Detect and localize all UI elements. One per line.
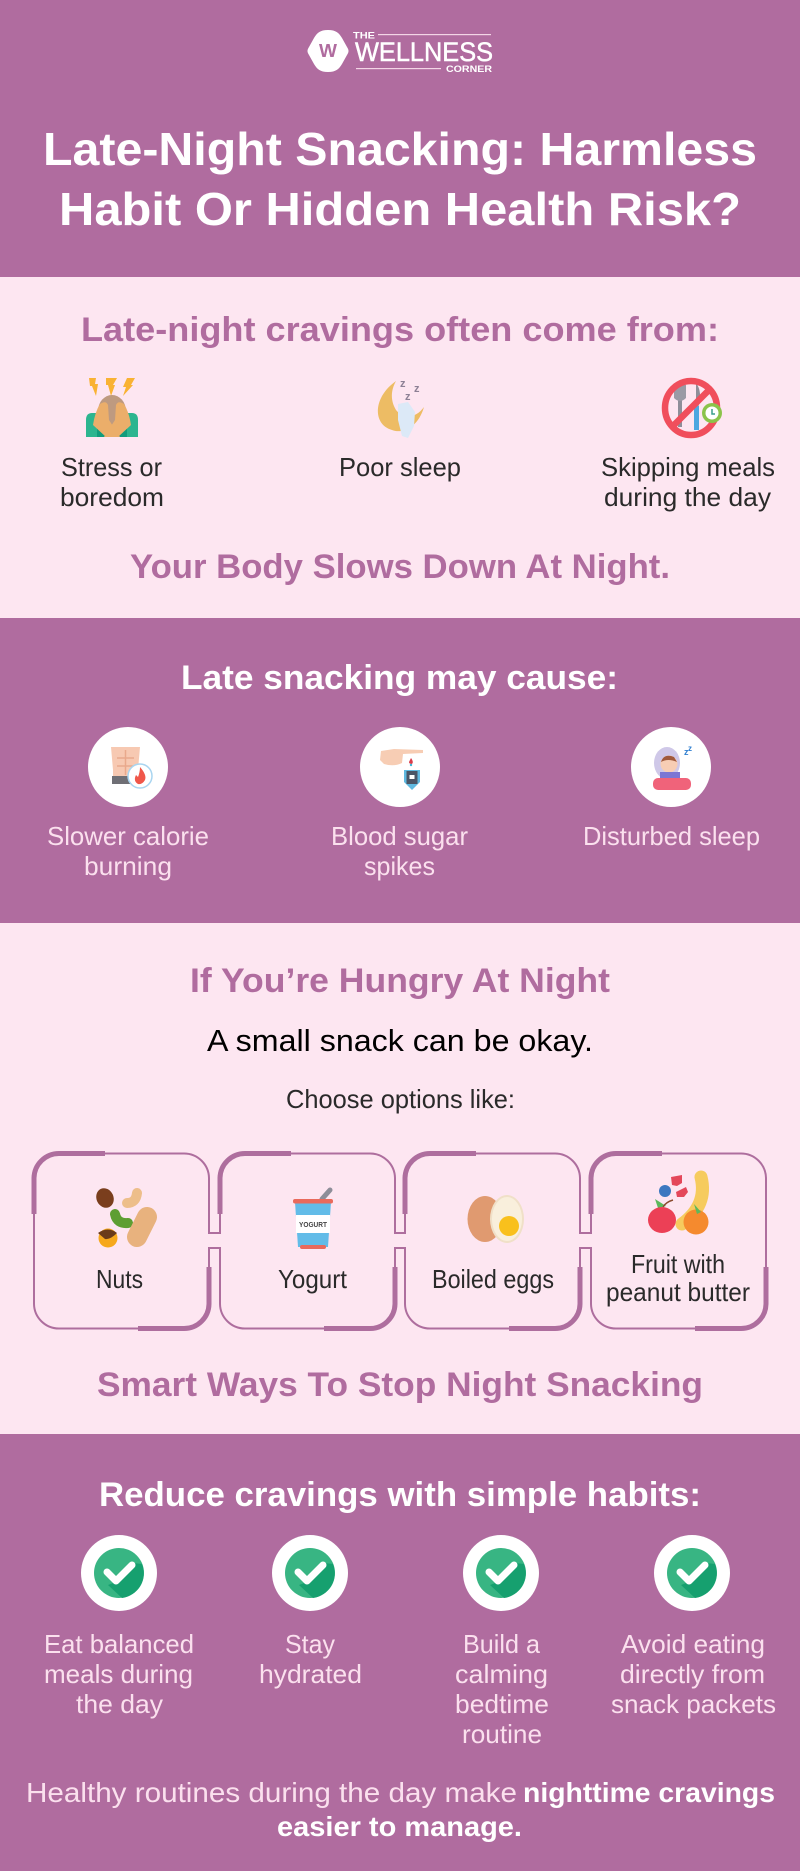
heading: smart ways: Smart Ways To Stop Night Snacking — [97, 1366, 703, 1404]
icon: sleeping moon: z — [400, 378, 406, 390]
icon: disturbed sleep: z — [688, 744, 692, 753]
label: stay hydrated — [259, 1629, 362, 1689]
label: bedtime routine: calming — [455, 1659, 548, 1689]
label: stay hydrated: Stay — [285, 1629, 335, 1659]
icon: sleeping moon: z — [414, 383, 420, 395]
icon: blood sugar meter — [360, 727, 440, 807]
panel: causes of cravings — [0, 277, 800, 618]
label: blood sugar spikes: spikes — [364, 851, 435, 881]
label: avoid snack packets — [611, 1629, 776, 1719]
logo: The Wellness Corner: W — [319, 41, 337, 61]
icon: check 2 — [272, 1535, 348, 1611]
label: eat balanced meals: meals during — [44, 1659, 193, 1689]
text: small snack: A small snack can be okay. — [207, 1023, 593, 1058]
icon: calorie burning — [88, 727, 168, 807]
icon: sleeping moon — [378, 378, 424, 438]
label: fruit with peanut butter — [606, 1249, 750, 1307]
label: bedtime routine: Build a — [463, 1629, 541, 1659]
text: choose options: Choose options like: — [286, 1084, 515, 1114]
label: skipping meals: during the day — [604, 482, 771, 512]
label: eat balanced meals: the day — [76, 1689, 163, 1719]
icon: check 3 — [463, 1535, 539, 1611]
title: Habit Or Hidden Health Risk? — [59, 183, 741, 235]
label: stress or boredom: boredom — [60, 482, 164, 512]
label: yogurt: Yogurt — [278, 1264, 348, 1294]
panel: if you're hungry — [0, 923, 800, 1434]
icon: check 1 — [81, 1535, 157, 1611]
label: eat balanced meals: Eat balanced — [44, 1629, 194, 1659]
panel: late snacking effects — [0, 618, 800, 923]
label: skipping meals — [601, 452, 775, 512]
icon: fruit — [648, 1175, 708, 1234]
label: eat balanced meals — [44, 1629, 194, 1719]
label: bedtime routine: bedtime — [455, 1689, 549, 1719]
logo: The Wellness Corner: WELLNESS — [355, 37, 493, 67]
icon: nuts — [93, 1185, 147, 1248]
label: fruit with peanut butter: peanut butter — [606, 1277, 750, 1307]
label: poor sleep: Poor sleep — [339, 452, 461, 482]
label: avoid snack packets: snack packets — [611, 1689, 776, 1719]
closing message: easier to manage. — [277, 1811, 522, 1842]
title: Late-Night Snacking: Harmless — [43, 123, 757, 175]
heading: reduce cravings: Reduce cravings with simple habits: — [99, 1476, 701, 1514]
logo: The Wellness Corner: CORNER — [446, 64, 493, 74]
title — [43, 123, 757, 235]
label: avoid snack packets: directly from — [620, 1659, 765, 1689]
closing message: Healthy routines during the day make — [26, 1777, 517, 1808]
closing message: nighttime cravings — [523, 1777, 775, 1808]
snack card frames — [34, 1154, 766, 1328]
heading: late-night cravings: Late-night cravings often come from: — [81, 311, 719, 349]
label: slower calorie burning — [47, 821, 209, 881]
label: boiled eggs: Boiled eggs — [432, 1264, 554, 1294]
label: nuts: Nuts — [96, 1264, 143, 1294]
icon: sleeping moon: z — [405, 391, 411, 403]
icon: yogurt — [293, 1190, 333, 1249]
label: disturbed sleep: Disturbed sleep — [583, 821, 760, 851]
label: stay hydrated: hydrated — [259, 1659, 362, 1689]
label: slower calorie burning: burning — [84, 851, 172, 881]
panel: simple habits — [0, 1434, 800, 1871]
icon: disturbed sleep: z — [684, 747, 689, 757]
icon: disturbed sleep — [631, 727, 711, 807]
label: blood sugar spikes: Blood sugar — [331, 821, 468, 851]
label: bedtime routine — [455, 1629, 549, 1749]
label: stress or boredom — [60, 452, 164, 512]
label: fruit with peanut butter: Fruit with — [631, 1249, 725, 1279]
logo: The Wellness Corner: THE — [353, 30, 375, 40]
icon: yogurt: YOGURT — [299, 1222, 328, 1229]
heading: late snacking may cause: Late snacking may cause: — [181, 659, 618, 697]
label: stress or boredom: Stress or — [61, 452, 162, 482]
heading: hungry at night: If You’re Hungry At Night — [190, 962, 610, 1000]
icon: stressed person — [86, 378, 138, 437]
label: blood sugar spikes — [331, 821, 468, 881]
icon: boiled eggs — [468, 1195, 524, 1243]
icon: check 4 — [654, 1535, 730, 1611]
label: slower calorie burning: Slower calorie — [47, 821, 209, 851]
icon: no meal with clock — [665, 381, 722, 435]
panel: header — [0, 0, 800, 277]
label: bedtime routine: routine — [462, 1719, 542, 1749]
label: skipping meals: Skipping meals — [601, 452, 775, 482]
label: avoid snack packets: Avoid eating — [621, 1629, 765, 1659]
logo: The Wellness Corner — [308, 30, 493, 74]
closing message — [26, 1777, 775, 1842]
heading: your body slows down: Your Body Slows Down At Night. — [130, 548, 670, 586]
